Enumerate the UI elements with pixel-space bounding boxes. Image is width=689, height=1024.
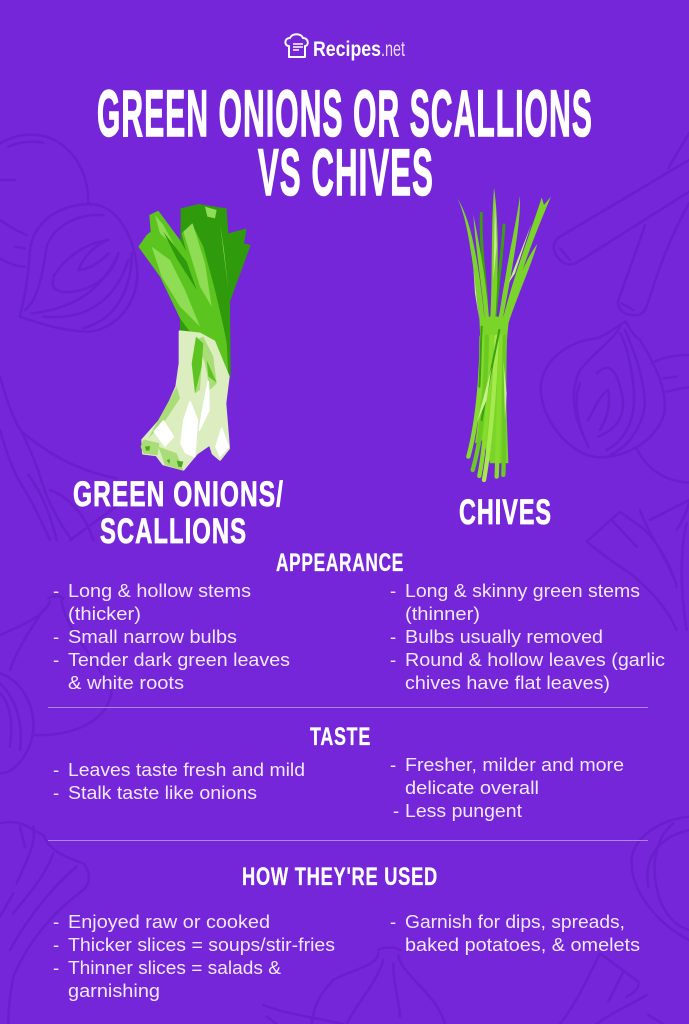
appearance list: green onions: - — [53, 626, 59, 647]
appearance list: chives — [390, 580, 665, 693]
title — [97, 76, 593, 209]
taste list: chives: Less pungent — [405, 800, 522, 821]
taste list: green onions: Stalk taste like onions — [68, 782, 257, 803]
illustration: green onions bunch — [138, 204, 251, 471]
title: VS CHIVES — [258, 135, 434, 209]
usage list: green onions: Thicker slices = soups/stir-fries — [68, 934, 335, 955]
illustration: chives bunch — [457, 187, 551, 480]
taste list: chives: - — [393, 800, 399, 821]
label: chives: CHIVES — [459, 493, 552, 532]
appearance list: chives: Bulbs usually removed — [405, 626, 603, 647]
label: green onions / scallions: GREEN ONIONS/ — [73, 475, 284, 514]
appearance list: chives: - — [390, 580, 396, 601]
appearance list: chives: - — [390, 626, 396, 647]
taste list: chives — [390, 754, 624, 821]
taste list: green onions — [53, 759, 305, 803]
heading: how they're used: HOW THEY'RE USED — [242, 863, 438, 891]
appearance list: green onions: & white roots — [68, 672, 184, 693]
appearance list: green onions: Tender dark green leaves — [68, 649, 290, 670]
heading: appearance: APPEARANCE — [276, 549, 404, 577]
usage list: green onions: - — [53, 911, 59, 932]
appearance list: chives: Long & skinny green stems — [405, 580, 640, 601]
appearance list: green onions: Long & hollow stems — [68, 580, 251, 601]
heading: taste: TASTE — [310, 723, 371, 751]
taste list: green onions: Leaves taste fresh and mild — [68, 759, 305, 780]
icon: chef hat and recipe book — [285, 34, 308, 57]
appearance list: chives: - — [390, 649, 396, 670]
usage list: chives: baked potatoes, & omelets — [405, 934, 640, 955]
background onion pattern right — [541, 133, 689, 630]
appearance list: green onions: (thicker) — [68, 603, 141, 624]
appearance list: green onions: - — [53, 649, 59, 670]
logo wordmark: .net — [381, 38, 405, 61]
background onion pattern lower right — [632, 817, 689, 940]
usage list: green onions: Enjoyed raw or cooked — [68, 911, 270, 932]
usage list: green onions: garnishing — [68, 980, 160, 1001]
appearance list: green onions — [53, 580, 290, 693]
appearance list: green onions: Small narrow bulbs — [68, 626, 237, 647]
usage list: chives: Garnish for dips, spreads, — [405, 911, 625, 932]
label: green onions / scallions: SCALLIONS — [100, 512, 247, 551]
background onion pattern left — [0, 135, 140, 540]
taste list: green onions: - — [53, 782, 59, 803]
logo — [285, 34, 405, 61]
appearance list: chives: Round & hollow leaves (garlic — [405, 649, 665, 670]
usage list: chives: - — [390, 911, 396, 932]
taste list: chives: Fresher, milder and more — [405, 754, 624, 775]
logo wordmark: Recipes — [313, 38, 381, 61]
taste list: chives: - — [390, 754, 396, 775]
usage list: green onions: - — [53, 957, 59, 978]
label: green onions / scallions — [73, 475, 284, 551]
appearance list: chives: chives have flat leaves) — [405, 672, 610, 693]
usage list: green onions — [53, 911, 335, 1001]
taste list: chives: delicate overall — [405, 777, 539, 798]
appearance list: green onions: - — [53, 580, 59, 601]
appearance list: chives: (thinner) — [405, 603, 480, 624]
usage list: green onions: Thinner slices = salads & — [68, 957, 282, 978]
taste list: green onions: - — [53, 759, 59, 780]
usage list: chives — [390, 911, 640, 955]
usage list: green onions: - — [53, 934, 59, 955]
background onion and leek pattern lower left — [0, 596, 112, 1024]
background onion and leek pattern bottom — [263, 947, 663, 1024]
